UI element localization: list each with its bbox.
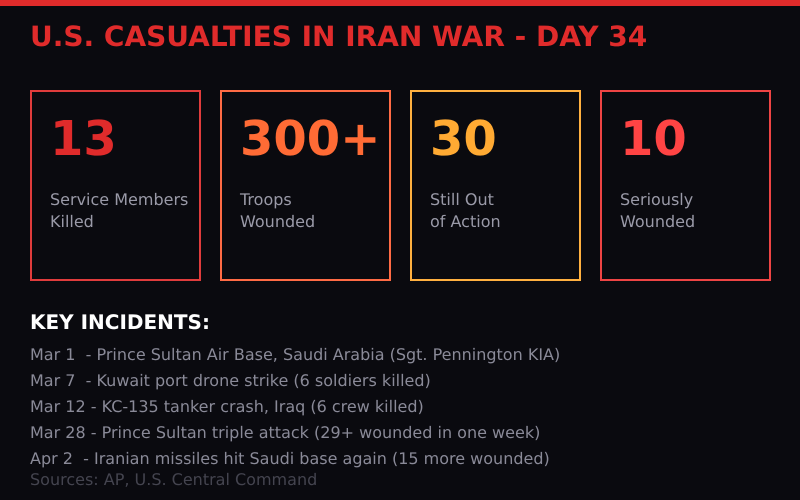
- panel: seriously wounded: Seriously: [620, 190, 693, 209]
- panel: still out of action: 30: [430, 111, 497, 167]
- panel: still out of action: [411, 91, 580, 280]
- panel: still out of action: of Action: [430, 212, 501, 231]
- top accent bar: [0, 0, 800, 6]
- sources: Sources: AP, U.S. Central Command: [30, 470, 317, 489]
- heading: key incidents: KEY INCIDENTS:: [30, 310, 210, 334]
- panel: troops wounded: Troops: [239, 190, 292, 209]
- incident list: Mar 12 - KC-135 tanker crash, Iraq (6 crew killed): [30, 397, 424, 416]
- panel: seriously wounded: 10: [620, 111, 687, 167]
- incident list: Mar 7 - Kuwait port drone strike (6 soldiers killed): [30, 371, 431, 390]
- panel: service members killed: Killed: [50, 212, 94, 231]
- panel: service members killed: [31, 91, 200, 280]
- panel: seriously wounded: [601, 91, 770, 280]
- panel: troops wounded: [221, 91, 390, 280]
- title: U.S. CASUALTIES IN IRAN WAR - DAY 34: [30, 20, 647, 53]
- incident list: Mar 1 - Prince Sultan Air Base, Saudi Arabia (Sgt. Pennington KIA): [30, 345, 560, 364]
- panel: troops wounded: 300+: [240, 111, 380, 167]
- panel: troops wounded: Wounded: [240, 212, 315, 231]
- panel: still out of action: Still Out: [430, 190, 494, 209]
- incident list: Mar 28 - Prince Sultan triple attack (29+ wounded in one week): [30, 423, 540, 442]
- panel: seriously wounded: Wounded: [620, 212, 695, 231]
- incident list: [30, 345, 560, 468]
- panel: service members killed: Service Members: [50, 190, 188, 209]
- panel: service members killed: 13: [50, 111, 117, 167]
- incident list: Apr 2 - Iranian missiles hit Saudi base again (15 more wounded): [30, 449, 550, 468]
